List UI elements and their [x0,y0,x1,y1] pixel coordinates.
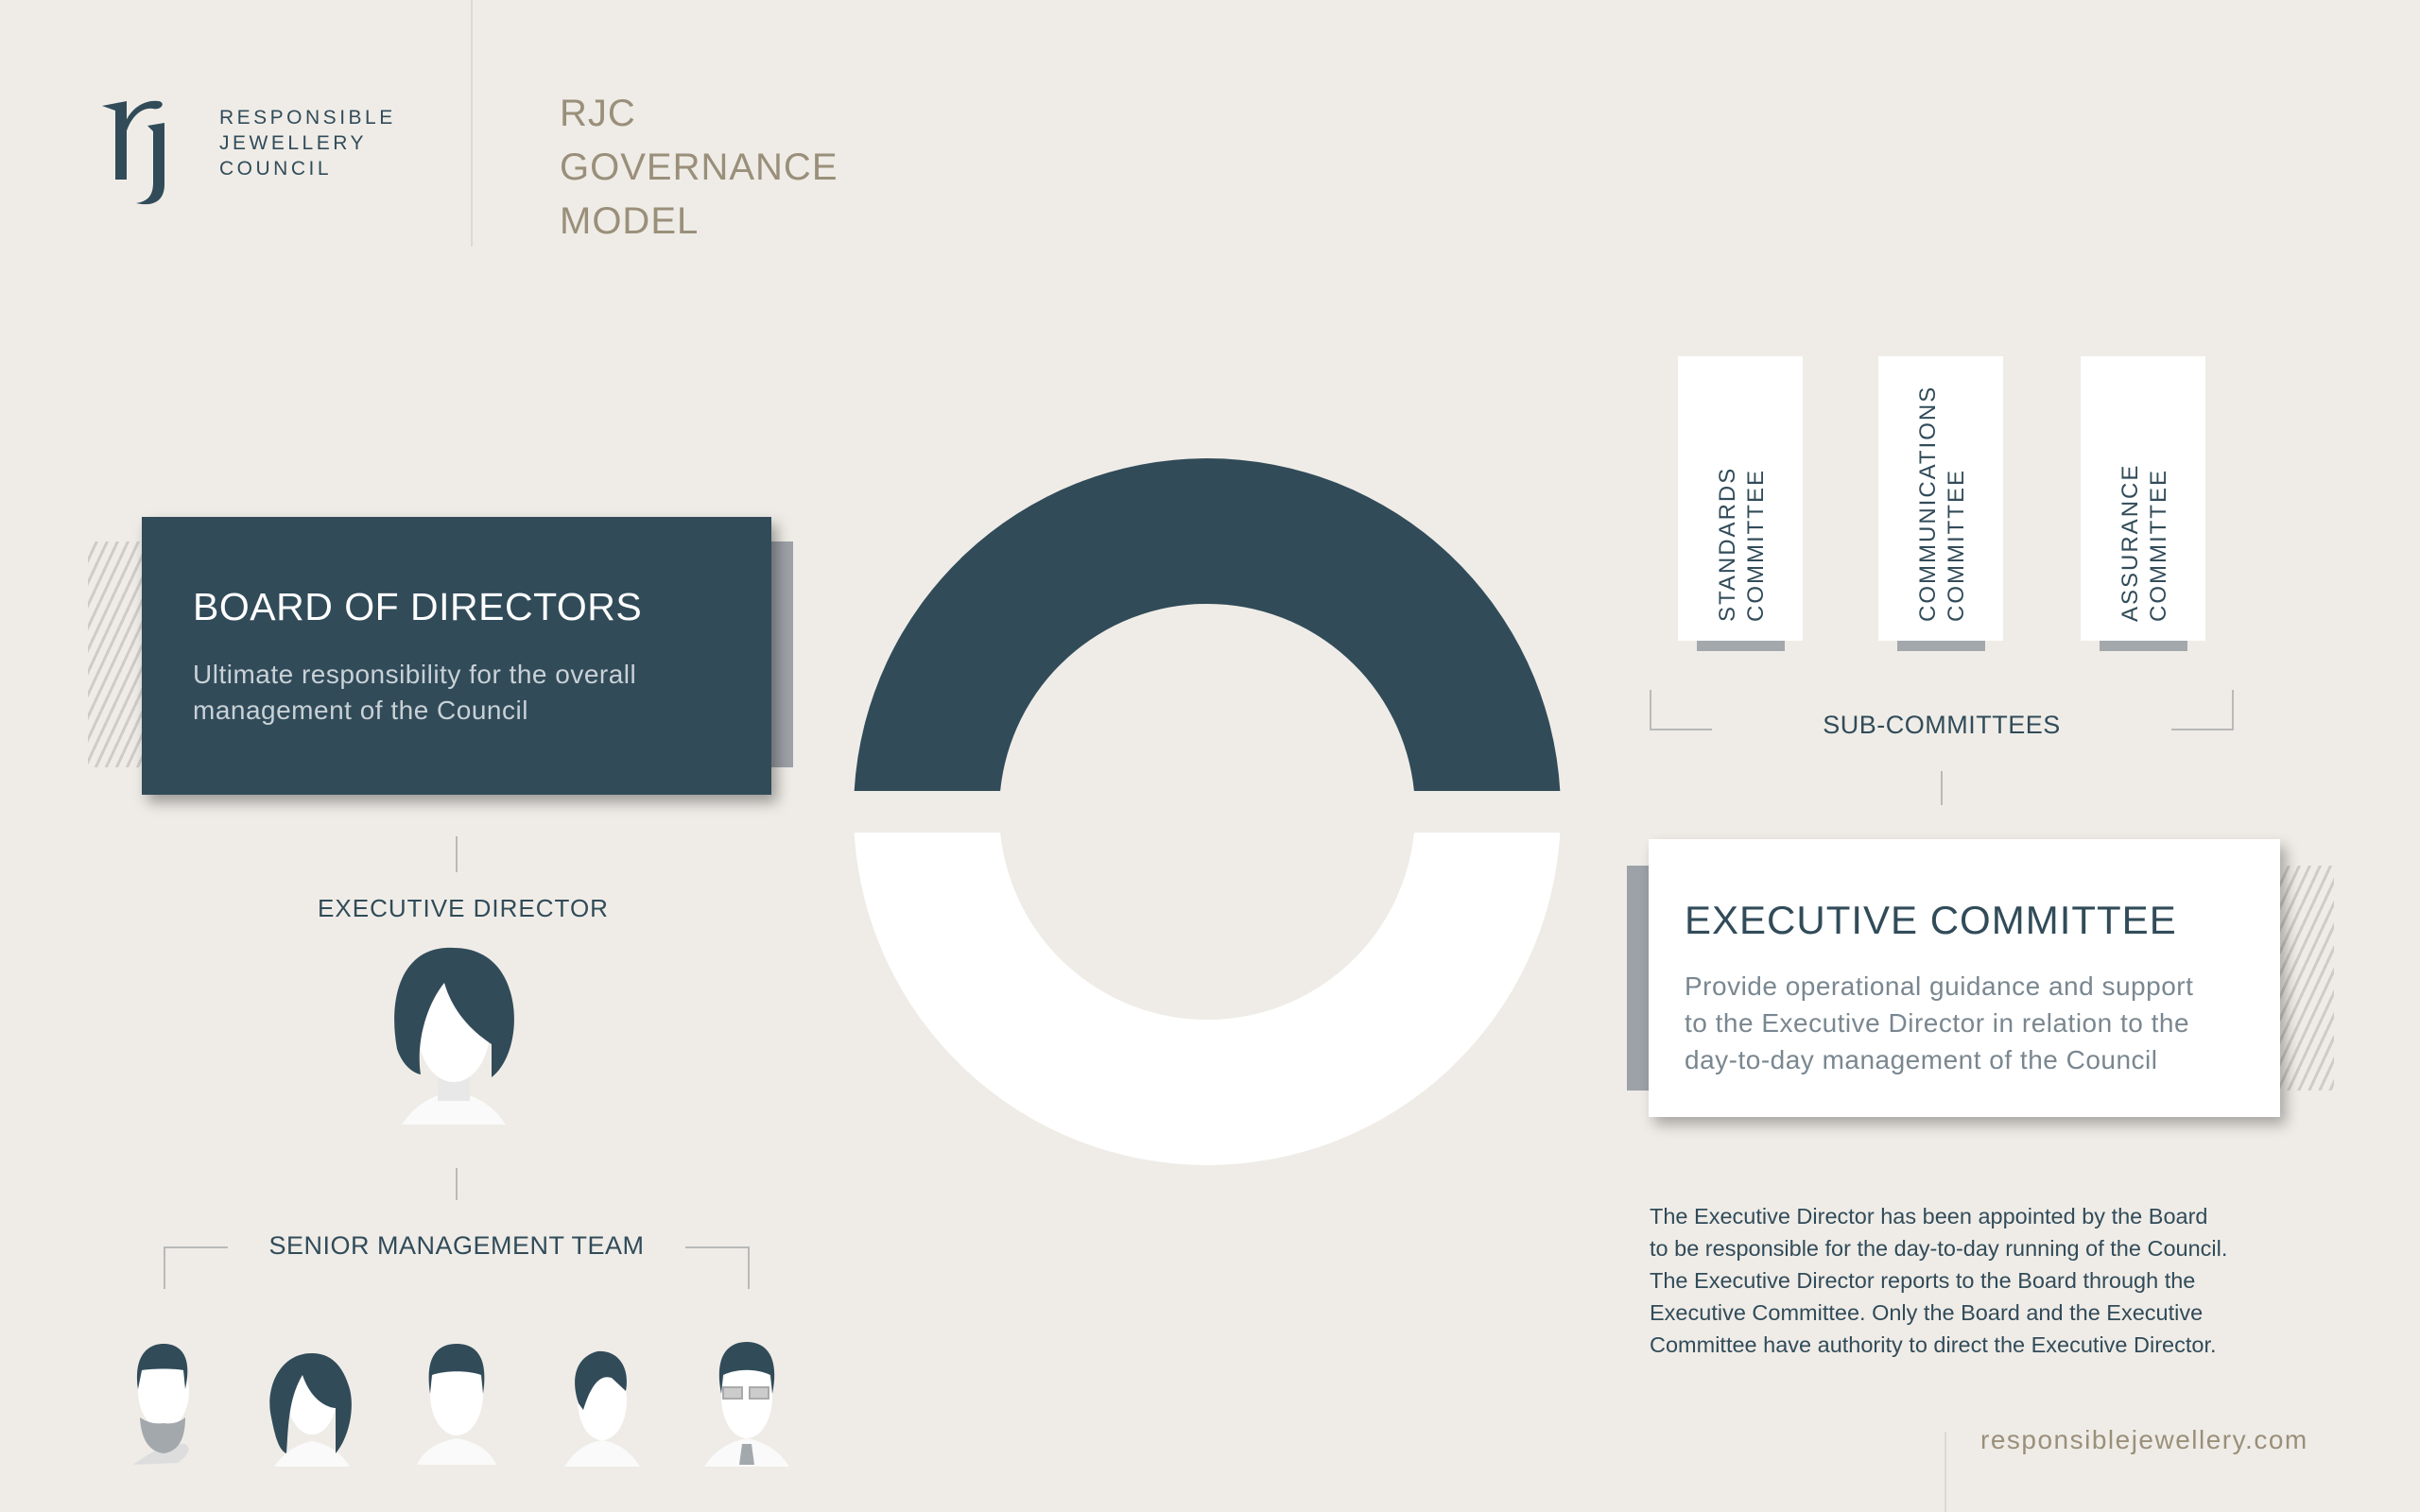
heading: senior management team: SENIOR MANAGEMENT TEAM [268,1231,645,1260]
card: assurance committee: ASSURANCE [2118,464,2143,622]
card: communications committee: COMMITTEE [1944,469,1969,622]
card: standards committee: COMMITTEE [1743,469,1769,622]
text: board description [193,660,636,725]
logo text [219,107,396,180]
heading: senior management team [164,1231,750,1289]
title: MODEL [560,200,699,242]
panel: sub-committees [1650,356,2234,805]
heading: board: BOARD OF DIRECTORS [193,585,642,628]
text: executive committee description: day-to-day management of the Council [1685,1045,2157,1074]
card: communications committee [1878,356,2003,641]
text: explanatory paragraph: Committee have authority to direct the Executive Director. [1650,1332,2217,1357]
logo [102,100,396,204]
icon: woman [269,1353,352,1467]
text: explanatory paragraph: to be responsible for the day-to-day running of the Council. [1650,1236,2227,1261]
chart: donut [855,458,1560,1165]
icon: rj monogram [102,100,164,204]
title: GOVERNANCE [560,146,838,188]
label: sub-committees: SUB-COMMITTEES [1823,711,2061,739]
text: executive committee description: Provide operational guidance and support [1685,971,2193,1001]
panel: board of directors [88,516,793,811]
card: communications committee: COMMUNICATIONS [1915,386,1941,622]
text: board description: management of the Council [193,696,528,725]
text: explanatory paragraph: Executive Committee. Only the Board and the Executive [1650,1300,2203,1325]
logo text: RESPONSIBLE [219,107,396,129]
icon: man [417,1344,496,1465]
card: standards committee: STANDARDS [1715,467,1740,622]
text: explanatory paragraph: The Executive Director has been appointed by the Board [1650,1204,2207,1228]
heading: executive director: EXECUTIVE DIRECTOR [318,894,609,922]
donut top half [855,458,1560,791]
title: RJC [560,93,636,134]
card: standards committee [1678,356,1803,641]
text: explanatory paragraph [1650,1204,2227,1357]
icon: executive director [394,947,514,1125]
heading: executive committee: EXECUTIVE COMMITTEE [1685,898,2177,942]
title [560,93,838,242]
icon: short-hair person [564,1351,640,1467]
panel: executive committee [1627,838,2334,1133]
icon: man with glasses [704,1342,789,1467]
donut bottom half [855,833,1560,1165]
text: explanatory paragraph: The Executive Director reports to the Board through the [1650,1268,2195,1293]
text: executive committee description: to the Executive Director in relation to the [1685,1008,2189,1038]
icon: bearded man [133,1344,189,1465]
card: assurance committee: COMMITTEE [2146,469,2171,622]
text: executive committee description [1685,971,2193,1074]
icons: senior management team [134,1342,789,1467]
logo text: JEWELLERY [219,132,367,154]
footer url: responsiblejewellery.com [1980,1425,2308,1454]
card: assurance committee [2081,356,2205,641]
logo text: COUNCIL [219,158,332,180]
text: board description: Ultimate responsibility for the overall [193,660,636,689]
